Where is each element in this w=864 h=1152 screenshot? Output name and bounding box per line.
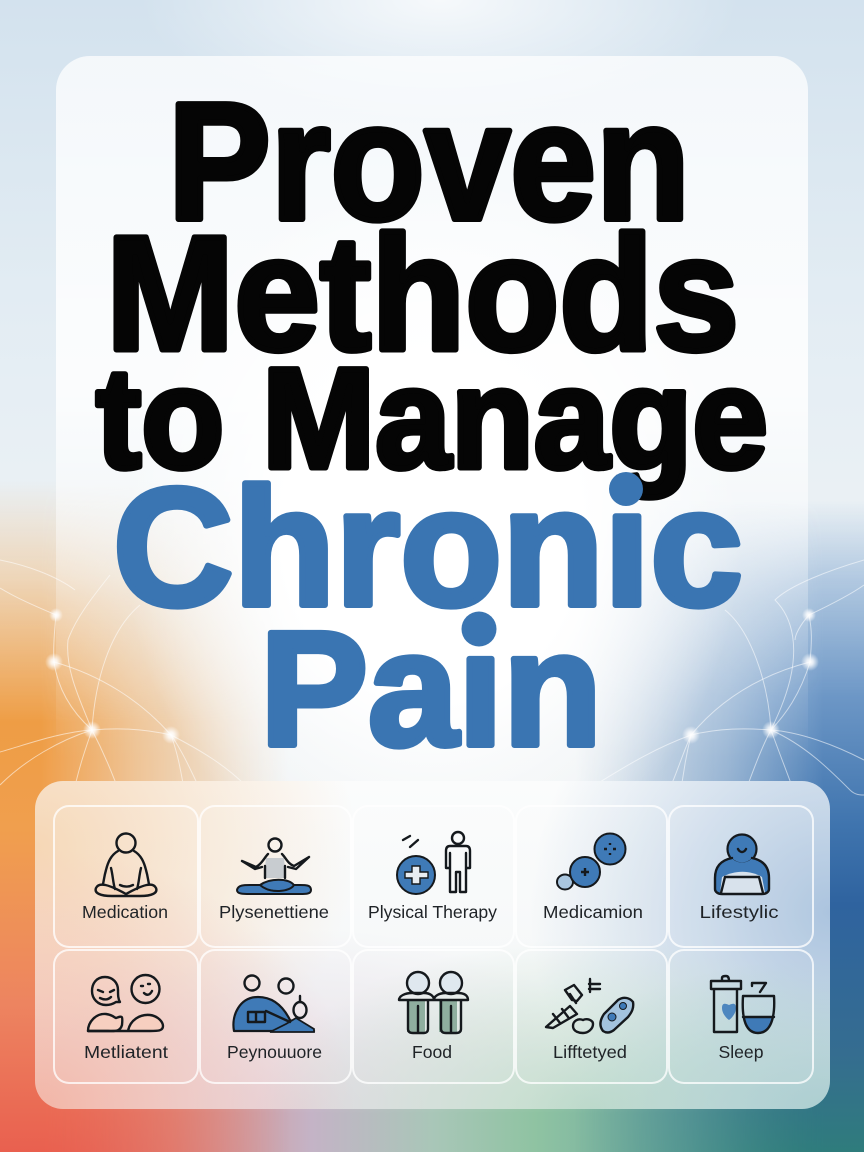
icon: yoga pose (237, 838, 311, 894)
card: Lifftetyed (515, 949, 668, 1084)
labels (82, 902, 779, 1062)
title card panel (56, 56, 808, 796)
labels: Plysenettiene (219, 902, 329, 922)
card: Medication (53, 805, 199, 948)
card: Peynouuore (199, 949, 352, 1084)
card: Metliatent (53, 949, 199, 1084)
labels: Peynouuore (227, 1042, 322, 1062)
card: Medicamion (515, 805, 668, 948)
labels: Metliatent (84, 1042, 168, 1062)
icon: group therapy (233, 976, 314, 1032)
labels: Food (412, 1042, 452, 1062)
icon: person with laptop (715, 834, 769, 894)
icon: storage jar and bowl (711, 976, 774, 1033)
labels: Medicamion (543, 902, 643, 922)
title: Pain (260, 597, 602, 780)
title: Chronic (113, 453, 743, 641)
foreground artwork (83, 101, 778, 1062)
icon: physio pill and person (397, 832, 470, 894)
labels: Lifestylic (700, 902, 779, 922)
title (96, 69, 768, 780)
labels: Medication (82, 902, 168, 922)
card: Plysical Therapy (352, 805, 515, 948)
panel: methods tray (35, 781, 830, 1109)
labels: Sleep (718, 1042, 764, 1062)
icon: medicine pills (557, 834, 626, 890)
card: Plysenettiene (199, 805, 352, 948)
labels: Plysical Therapy (368, 902, 497, 922)
icon: bandage and medical items (546, 979, 633, 1033)
icon: faces and bodies (88, 975, 163, 1031)
card: Sleep (668, 949, 814, 1084)
icon: meditating person (96, 834, 156, 896)
title: Proven (168, 69, 690, 255)
icon: two people (399, 972, 468, 1033)
card: Food (352, 949, 515, 1084)
title: Methods (106, 202, 739, 384)
card: Lifestylic (668, 805, 814, 948)
labels: Lifftetyed (553, 1042, 627, 1062)
title: to Manage (96, 340, 768, 498)
